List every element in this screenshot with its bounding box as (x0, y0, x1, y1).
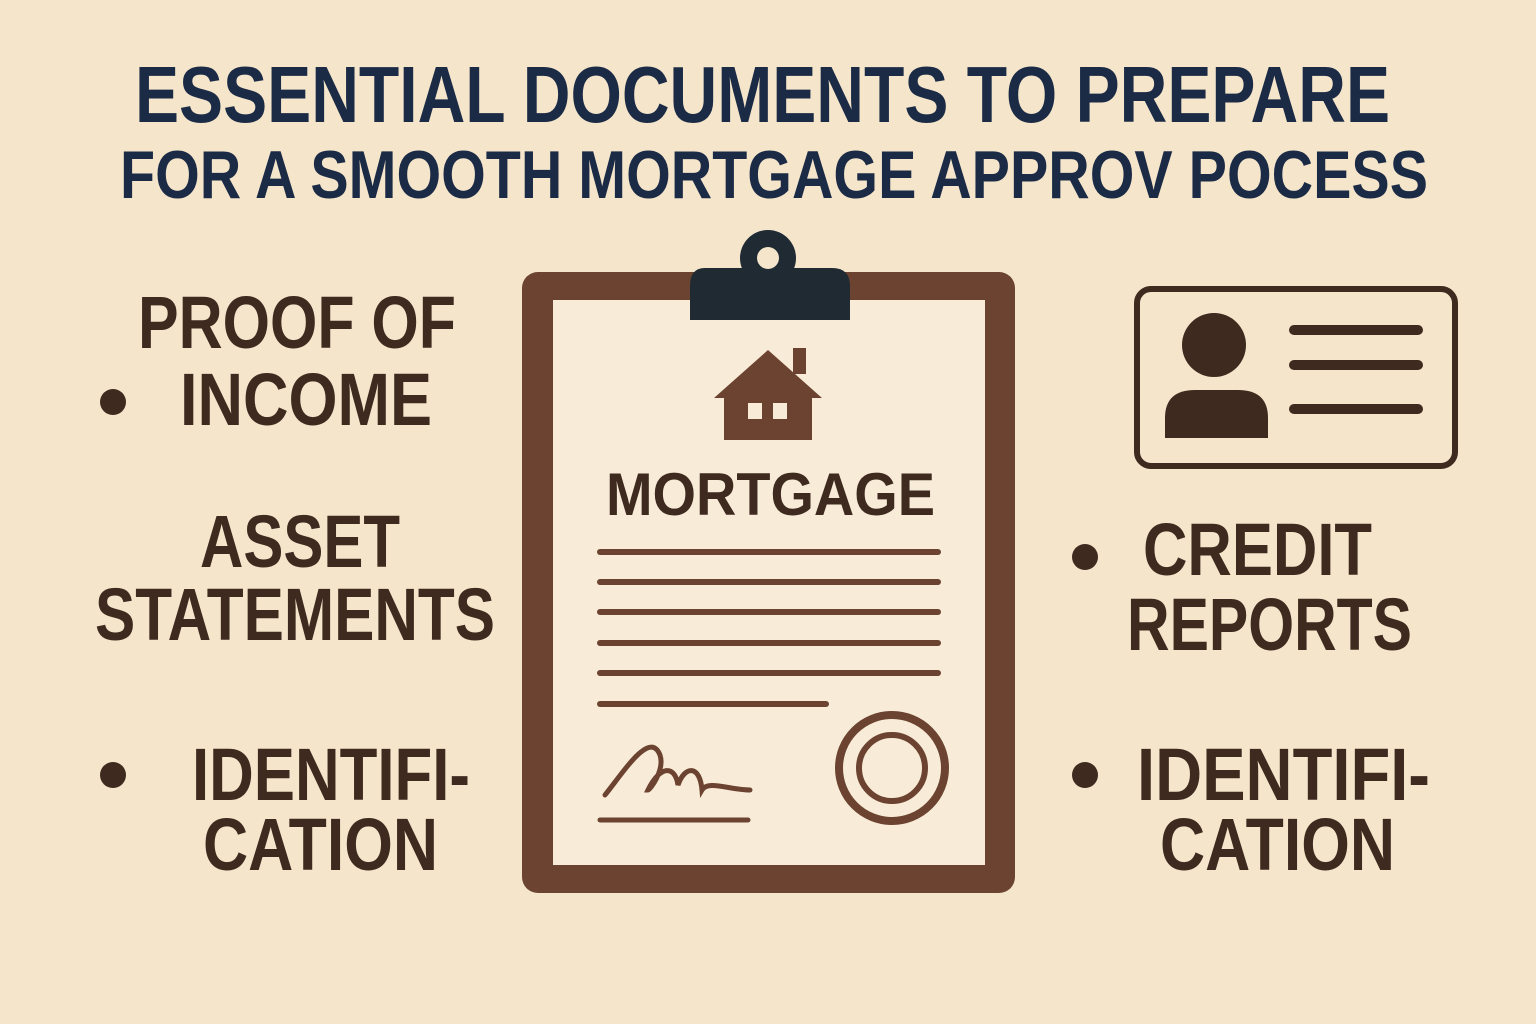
left item: identification (100, 733, 470, 886)
icon: id card (1137, 289, 1455, 466)
left item: identification: CATION (203, 803, 438, 886)
right item: identification: IDENTIFI- (1137, 733, 1430, 816)
title (120, 50, 1428, 213)
left item: proof of income (100, 281, 456, 441)
clipboard (522, 230, 1015, 893)
left item: proof of income: PROOF OF (138, 281, 456, 364)
right item: credit reports: CREDIT (1143, 508, 1372, 591)
document lines (600, 552, 938, 704)
left item: proof of income: INCOME (180, 358, 432, 441)
clip (690, 230, 850, 320)
seal (839, 715, 945, 821)
right item: credit reports (1072, 508, 1412, 666)
left item: asset statements (95, 500, 495, 656)
left item: identification: IDENTIFI- (192, 733, 470, 816)
right item: identification: CATION (1160, 803, 1395, 886)
icon: house (714, 348, 822, 440)
signature (600, 747, 750, 820)
right item: credit reports: REPORTS (1127, 583, 1412, 666)
left item: asset statements: ASSET (200, 500, 400, 583)
left item: asset statements: STATEMENTS (95, 573, 495, 656)
mortgage label: MORTGAGE (606, 461, 935, 528)
right item: identification (1072, 733, 1430, 886)
